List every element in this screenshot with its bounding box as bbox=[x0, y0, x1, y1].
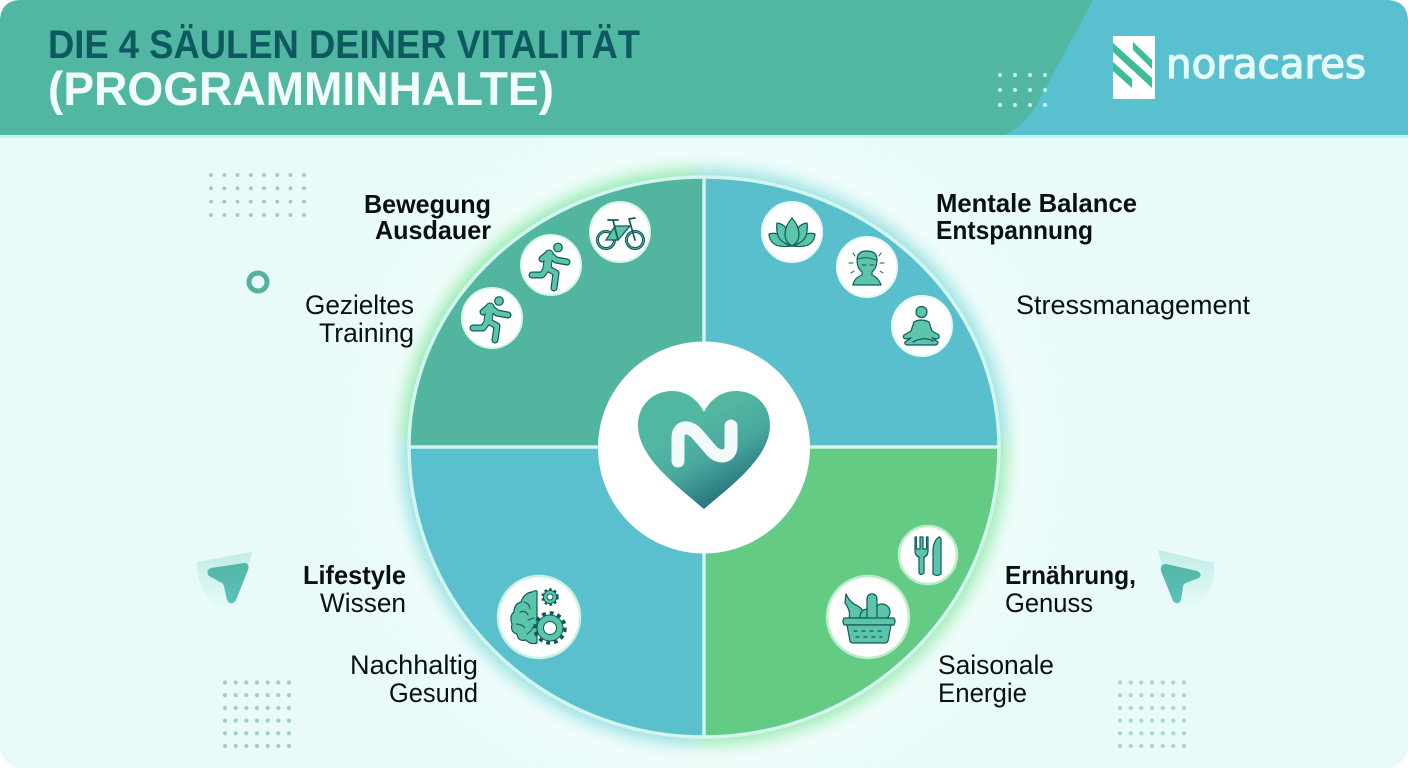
logo: noracares: noracares bbox=[1166, 40, 1366, 88]
label: Gezieltes Training: Gezieltes bbox=[305, 290, 414, 320]
label: Gezieltes Training: Training bbox=[319, 318, 414, 348]
label: Saisonale Energie: Energie bbox=[938, 678, 1027, 708]
label: Stressmanagement: Stressmanagement bbox=[1016, 290, 1250, 320]
label: Gezieltes Training bbox=[305, 290, 414, 348]
label: Saisonale Energie: Saisonale bbox=[938, 650, 1054, 680]
segment: Mentale Balance bbox=[704, 177, 999, 447]
segment: Bewegung bbox=[409, 177, 704, 447]
pillar wheel bbox=[409, 177, 999, 737]
label: Nachhaltig Gesund bbox=[350, 650, 478, 708]
label: Nachhaltig Gesund: Gesund bbox=[389, 678, 478, 708]
segment: Ernährung bbox=[704, 447, 999, 737]
label: Mentale Balance Entspannung bbox=[936, 188, 1137, 245]
label: Saisonale Energie bbox=[938, 650, 1054, 708]
icon: meditation bbox=[892, 296, 952, 356]
icon: vegetable basket bbox=[827, 576, 909, 658]
title bbox=[48, 23, 640, 115]
arrow ornament: left bbox=[197, 552, 252, 612]
label: Mentale Balance Entspannung: Mentale Balance bbox=[936, 188, 1137, 218]
label: Mentale Balance Entspannung: Entspannung bbox=[936, 215, 1093, 245]
label: Bewegung Ausdauer bbox=[364, 189, 491, 245]
label: Bewegung Ausdauer: Ausdauer bbox=[375, 215, 491, 245]
header band bbox=[0, 0, 1408, 138]
icon: sprinter bbox=[462, 288, 522, 348]
label: Lifestyle Wissen: Wissen bbox=[320, 588, 406, 618]
label: Bewegung Ausdauer: Bewegung bbox=[364, 189, 491, 219]
label: Ernährung, Genuss bbox=[1005, 560, 1136, 618]
dot grid: top left bbox=[209, 173, 306, 217]
wheel coloured glow bbox=[409, 177, 999, 737]
icon: brain with gears bbox=[498, 576, 580, 658]
dot grid: bottom left bbox=[223, 680, 291, 748]
label: Lifestyle Wissen bbox=[303, 560, 406, 618]
wheel outline and dividers bbox=[409, 177, 999, 737]
icon: runner bbox=[521, 235, 581, 295]
title: DIE 4 SÄULEN DEINER VITALITÄT bbox=[48, 23, 640, 67]
label: Lifestyle Wissen: Lifestyle bbox=[303, 560, 406, 590]
icon: lotus bbox=[762, 202, 822, 262]
arrow ornament: right bbox=[1158, 550, 1214, 612]
icon: cutlery bbox=[899, 526, 957, 584]
label: Ernährung, Genuss: Genuss bbox=[1005, 588, 1093, 618]
logo: noracares bbox=[1113, 36, 1366, 99]
dot grid: bottom right bbox=[1118, 680, 1186, 748]
label: Nachhaltig Gesund: Nachhaltig bbox=[350, 650, 478, 680]
icon: calm face bbox=[837, 237, 897, 297]
wheel outer white halo bbox=[409, 177, 999, 737]
header dots bbox=[998, 73, 1047, 107]
icon: bicycle bbox=[590, 202, 650, 262]
centre disc with heart logo bbox=[598, 342, 810, 554]
segment: Lifestyle bbox=[409, 447, 704, 737]
label: Ernährung, Genuss: Ernährung, bbox=[1005, 560, 1136, 590]
title: (PROGRAMMINHALTE) bbox=[48, 62, 554, 115]
ring ornament bbox=[249, 273, 267, 291]
